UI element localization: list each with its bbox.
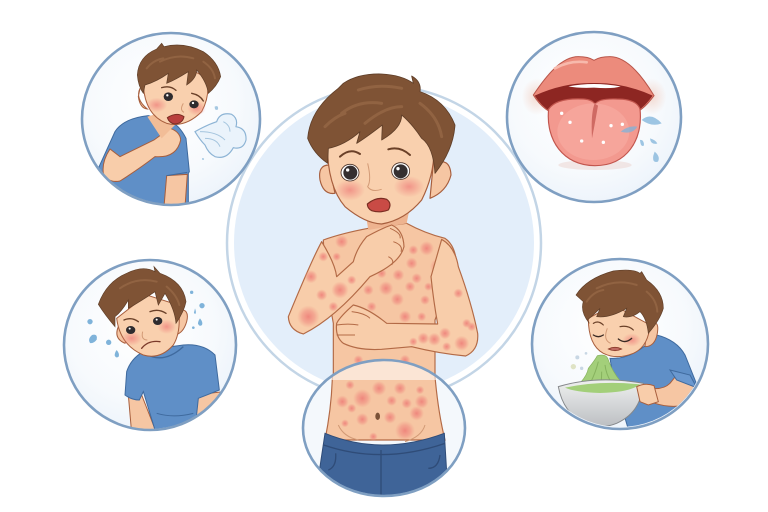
neck [365,207,410,230]
nose [368,163,382,191]
torso [322,223,457,437]
panel: abdomen magnifier [302,353,466,500]
panel: central circle [227,86,541,400]
torso rash [320,235,469,365]
left arm rash [297,252,356,328]
hair [308,74,455,173]
sweating child [98,267,223,433]
blush [335,176,424,201]
mouth with tongue [522,57,667,170]
mouth [367,198,390,212]
arm: viewer right, hand on belly [336,239,478,356]
ears [320,162,451,198]
abdomen skin and shorts [320,361,447,495]
illustration: child symptoms [62,30,710,498]
panel: vomiting [532,259,708,435]
coughing child [97,43,246,215]
arm rash [409,288,476,351]
hair highlights [325,86,442,137]
panel: difficulty breathing / cough [82,33,260,215]
panel: fever / sweating [64,260,236,433]
panel: tongue [507,32,681,202]
arm: viewer left, hand on throat [288,225,404,334]
vomiting child [558,270,698,435]
central child figure [288,74,478,437]
fingers [337,228,401,335]
sweat drops [87,291,205,357]
face [327,97,434,224]
eyes [340,148,410,181]
